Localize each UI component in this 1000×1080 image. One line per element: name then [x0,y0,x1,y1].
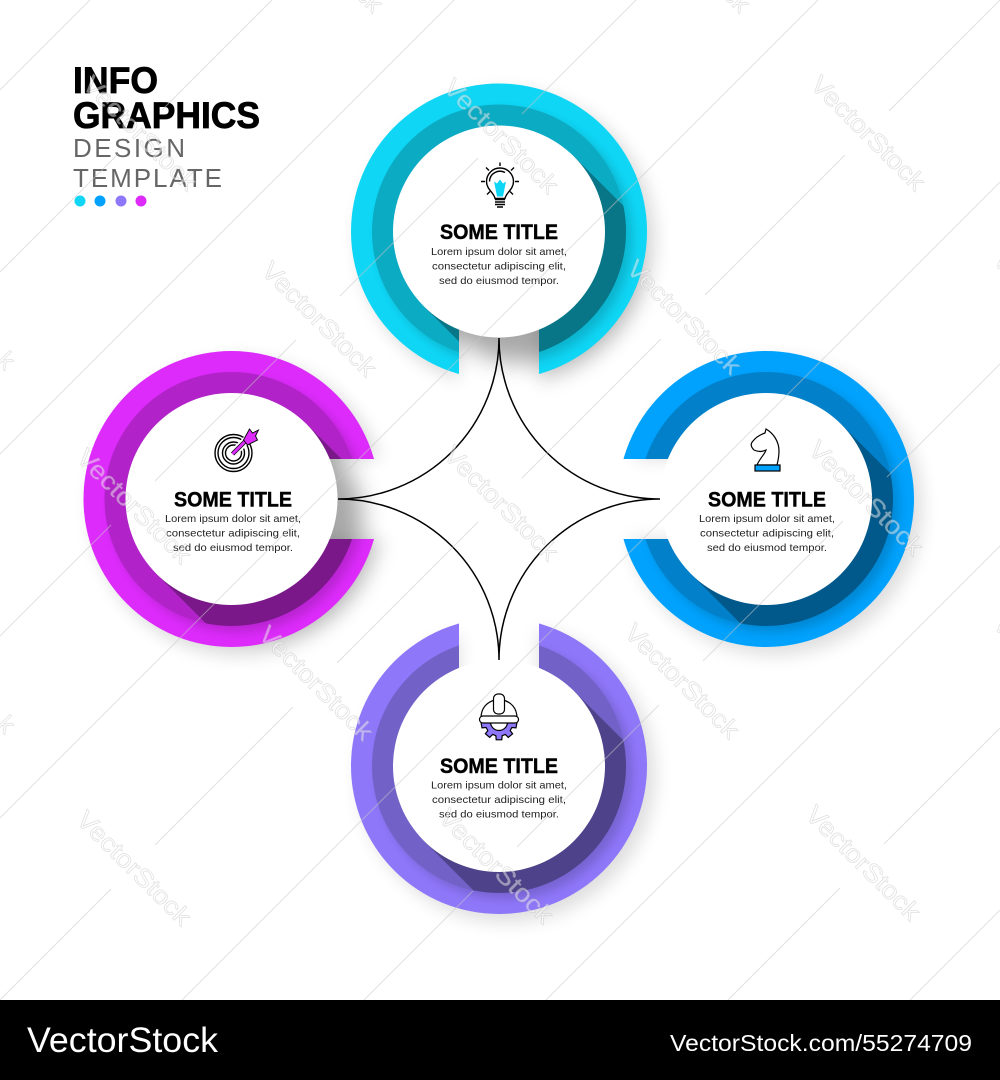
watermark: repeated VectorStock text: VectorStock [438,73,564,200]
text block [699,513,835,554]
heading: SOME TITLE [174,488,292,512]
watermark: repeated VectorStock text: VectorStock [800,800,926,927]
text block: sed do eiusmod tempor. [439,275,559,287]
watermark: repeated VectorStock text: VectorStock [619,618,745,745]
panel: right circle (blue) [618,351,941,674]
watermark: repeated VectorStock text: VectorStock [805,70,931,197]
icon: target with arrow [215,429,258,472]
title block: TEMPLATE [73,163,222,193]
text block: sed do eiusmod tempor. [439,808,559,820]
watermark: repeated VectorStock text: VectorStock [71,443,197,570]
text block: sed do eiusmod tempor. [707,542,827,554]
text block [165,513,301,554]
text block: Lorem ipsum dolor sit amet, [431,246,567,258]
text block: consectetur adipiscing elit, [700,528,834,540]
text block: Lorem ipsum dolor sit amet, [699,513,835,525]
heading: SOME TITLE [708,488,826,512]
watermark: repeated VectorStock text: VectorStock [71,805,197,932]
text block: consectetur adipiscing elit, [432,260,566,272]
icon: chess knight [751,429,780,471]
title block: GRAPHICS [73,94,260,136]
panel: top circle (cyan) [351,84,674,406]
text block [431,780,567,820]
heading: SOME TITLE [440,220,558,244]
watermark: repeated VectorStock text: VectorStock [433,803,559,930]
watermark: repeated VectorStock text: VectorStock [77,70,203,197]
watermark: repeated VectorStock text: VectorStock [621,254,747,381]
title block [73,59,260,206]
text block: Lorem ipsum dolor sit amet, [431,780,567,792]
watermark: repeated VectorStock text: VectorStock [803,435,929,562]
icon: helmet with gear [480,694,518,740]
footer image id: VectorStock.com/55274709 [670,1030,972,1056]
panel: bottom circle (purple) [351,618,674,941]
heading: SOME TITLE [440,754,558,778]
title block: DESIGN [73,133,185,163]
text block: consectetur adipiscing elit, [432,794,566,806]
icon: light bulb [481,162,519,207]
watermark: repeated VectorStock text: VectorStock [438,440,564,567]
footer logo text: VectorStock [27,1021,219,1060]
footer bar [0,1000,1000,1080]
text block: consectetur adipiscing elit, [166,528,300,540]
watermark: repeated VectorStock text: VectorStock [256,256,382,383]
text block [431,246,567,287]
title block: INFO [73,59,158,101]
connector: four curved star lines [338,338,660,660]
text block: Lorem ipsum dolor sit amet, [165,513,301,525]
panel: left circle (magenta) [84,351,406,674]
watermark: repeated VectorStock text: VectorStock [253,620,379,747]
text block: sed do eiusmod tempor. [173,542,293,554]
legend dots [74,196,146,206]
